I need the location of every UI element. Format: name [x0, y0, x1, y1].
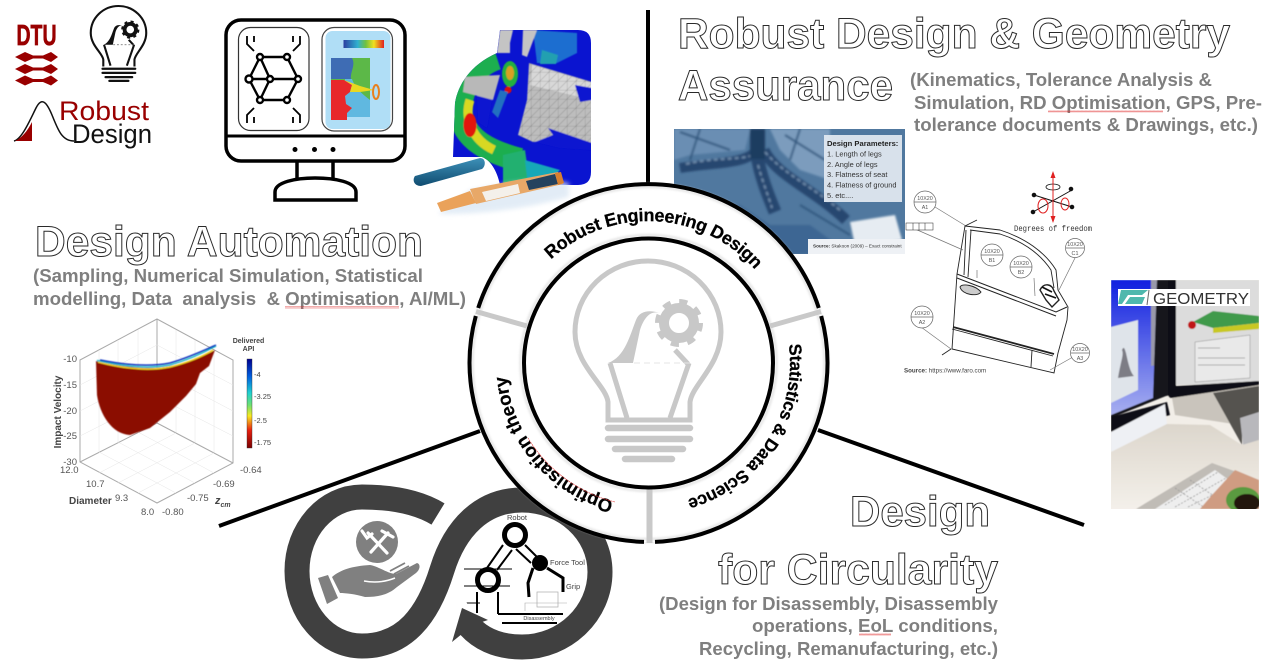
chart: 3D scatter of impact velocity: Impact Velocity: [53, 375, 64, 448]
diagram: disassembly robot: [461, 513, 585, 623]
callout: C1: [1066, 238, 1084, 258]
callout: B1: 10X20: [984, 249, 1000, 255]
callout: A3: 10X20: [1072, 347, 1088, 353]
chart: 3D scatter of impact velocity: -15: [63, 380, 77, 391]
text: geometry assurance topics: Simulation, RD Optimisation, GPS, Pre-: [914, 92, 1262, 113]
callout: A1: A1: [922, 205, 928, 211]
logo: DTU: [15, 20, 58, 86]
callout: A3: A3: [1077, 356, 1083, 362]
heading: Design for Circularity: Design: [850, 488, 990, 536]
callout: A1: 10X20: [917, 196, 933, 202]
diagram: disassembly robot: Robot: [507, 513, 528, 522]
text box: design parameters: 3. Flatness of seat: [827, 170, 887, 179]
callout: A3: [1070, 344, 1090, 362]
chart: 3D scatter of impact velocity: -2.5: [254, 416, 267, 425]
icon: central lightbulb: [575, 261, 721, 459]
source note: [808, 239, 905, 254]
icon: infinity circular loop: [297, 497, 600, 647]
chart: 3D scatter of impact velocity: -20: [63, 406, 77, 417]
text: design automation topics: (Sampling, Numerical Simulation, Statistical: [33, 265, 423, 286]
icon: hand holding tools: [318, 521, 420, 604]
callout: B1: [981, 244, 1003, 266]
callout: C1: C1: [1072, 251, 1078, 257]
callout: C1: 10X20: [1067, 242, 1083, 248]
heading: Design for Circularity: [718, 488, 998, 594]
text: design automation topics: [33, 265, 466, 309]
image: finite element simulation and injector pens: [414, 30, 592, 214]
logo: Robust Design: Robust: [59, 96, 150, 126]
source note: Source: Skakoon (2009) – Exact constraint: [813, 244, 902, 248]
central ring diagram: [468, 181, 830, 544]
callout: A2: A2: [919, 320, 925, 326]
diagram: car door with tolerances: Source: https://www.faro.com: [904, 368, 986, 374]
chart: 3D scatter of impact velocity: 8.0: [141, 507, 154, 518]
ring label: Robust Engineering Design: Robust Engineering Design: [544, 208, 760, 269]
text box: design parameters: 2. Angle of legs: [827, 160, 878, 169]
logo: RE Geometry: GEOMETRY: [1153, 291, 1249, 308]
text box: design parameters: 1. Length of legs: [827, 150, 882, 158]
icon: degrees of freedom: Degrees of freedom: [1014, 224, 1092, 234]
segment dividers: [476, 312, 821, 543]
chart: 3D scatter of impact velocity: Diameter: [69, 496, 112, 507]
text: design automation topics: modelling, Data analysis & Optimisation, AI/ML): [33, 288, 466, 309]
outer arcs: [470, 184, 827, 542]
text: circularity topics: operations, EoL conditions,: [752, 615, 998, 636]
right pane: simulation contour: [322, 28, 392, 131]
chart: 3D scatter of impact velocity: -25: [63, 431, 77, 442]
callout: A2: [911, 306, 933, 328]
icon: monitor: [226, 20, 405, 200]
chart: 3D scatter of impact velocity: cm: [220, 502, 231, 509]
logo: DTU: DTU: [16, 20, 56, 52]
icon: degrees of freedom: [1014, 171, 1092, 234]
chart: 3D scatter of impact velocity: -3.25: [254, 392, 271, 401]
chart: 3D scatter of impact velocity: 12.0: [60, 465, 78, 476]
text box: design parameters: 4. Flatness of ground: [827, 180, 896, 190]
image: geometry software on workstation: [1111, 280, 1260, 513]
heading: Robust Design & Geometry Assurance: Assurance: [678, 62, 893, 110]
text box: design parameters: Design Parameters:: [827, 139, 898, 148]
text: geometry assurance topics: [910, 69, 1262, 135]
chart: 3D scatter of impact velocity: -0.80: [162, 507, 184, 518]
diagram: disassembly robot: Force Tool: [550, 558, 585, 567]
chart: 3D scatter of impact velocity: [53, 319, 271, 518]
chart: 3D scatter of impact velocity: API: [243, 346, 254, 353]
chart: 3D scatter of impact velocity: -0.69: [213, 479, 235, 490]
logo: Robust Design: Design: [72, 119, 152, 149]
chart: 3D scatter of impact velocity: -10: [63, 354, 77, 365]
segment shadows: [472, 187, 824, 539]
callout: B1: B1: [989, 258, 995, 264]
chart: 3D scatter of impact velocity: -30: [63, 457, 77, 468]
callout: A1: [914, 191, 936, 213]
callout: B2: 10X20: [1013, 261, 1029, 267]
text box: design parameters: 5. etc....: [827, 191, 853, 200]
heading: Robust Design & Geometry Assurance: Robust Design & Geometry: [678, 10, 1230, 58]
heading: Design Automation: Design Automation: [35, 218, 423, 266]
logo: RE Geometry: [1118, 289, 1250, 306]
text: circularity topics: [659, 593, 999, 659]
text: circularity topics: Recycling, Remanufacturing, etc.): [699, 638, 998, 659]
callout: B2: [1010, 256, 1032, 278]
chart: 3D scatter of impact velocity: z: [215, 495, 220, 507]
chart: 3D scatter of impact velocity: Delivered: [233, 338, 264, 345]
heading: Robust Design & Geometry Assurance: [678, 10, 1230, 110]
text: circularity topics: (Design for Disassembly, Disassembly: [659, 593, 999, 614]
callout: A2: 10X20: [914, 311, 930, 317]
diagram: disassembly robot: Grip: [566, 582, 580, 591]
chart: 3D scatter of impact velocity: -1.75: [254, 438, 271, 447]
diagram: disassembly robot: Disassembly: [523, 616, 555, 622]
diagram: car door with tolerances: [904, 191, 1090, 374]
text: geometry assurance topics: (Kinematics, Tolerance Analysis &: [910, 69, 1212, 90]
ring label: Statistics & Data Science: Statistics & Data Science: [688, 344, 802, 508]
chart: 3D scatter of impact velocity: -0.75: [187, 493, 209, 504]
left pane: network cube: [238, 28, 309, 130]
heading: Design for Circularity: for Circularity: [718, 546, 998, 594]
icon: small lightbulb logo: [91, 6, 146, 81]
logo: Robust Design: [14, 96, 152, 149]
chart: 3D scatter of impact velocity: 9.3: [115, 493, 128, 504]
text box: design parameters: [824, 135, 902, 202]
text: geometry assurance topics: tolerance documents & Drawings, etc.): [914, 114, 1258, 135]
image: table with design parameters: [674, 129, 905, 254]
chart: 3D scatter of impact velocity: -4: [254, 370, 261, 379]
callout: B2: B2: [1018, 270, 1024, 276]
chart: 3D scatter of impact velocity: -0.64: [240, 465, 262, 476]
ring label: Optimisation theory: Optimisation theory: [496, 377, 612, 512]
inner circle: [524, 238, 773, 488]
divider rays: [219, 10, 1084, 526]
chart: 3D scatter of impact velocity: 10.7: [86, 479, 104, 490]
